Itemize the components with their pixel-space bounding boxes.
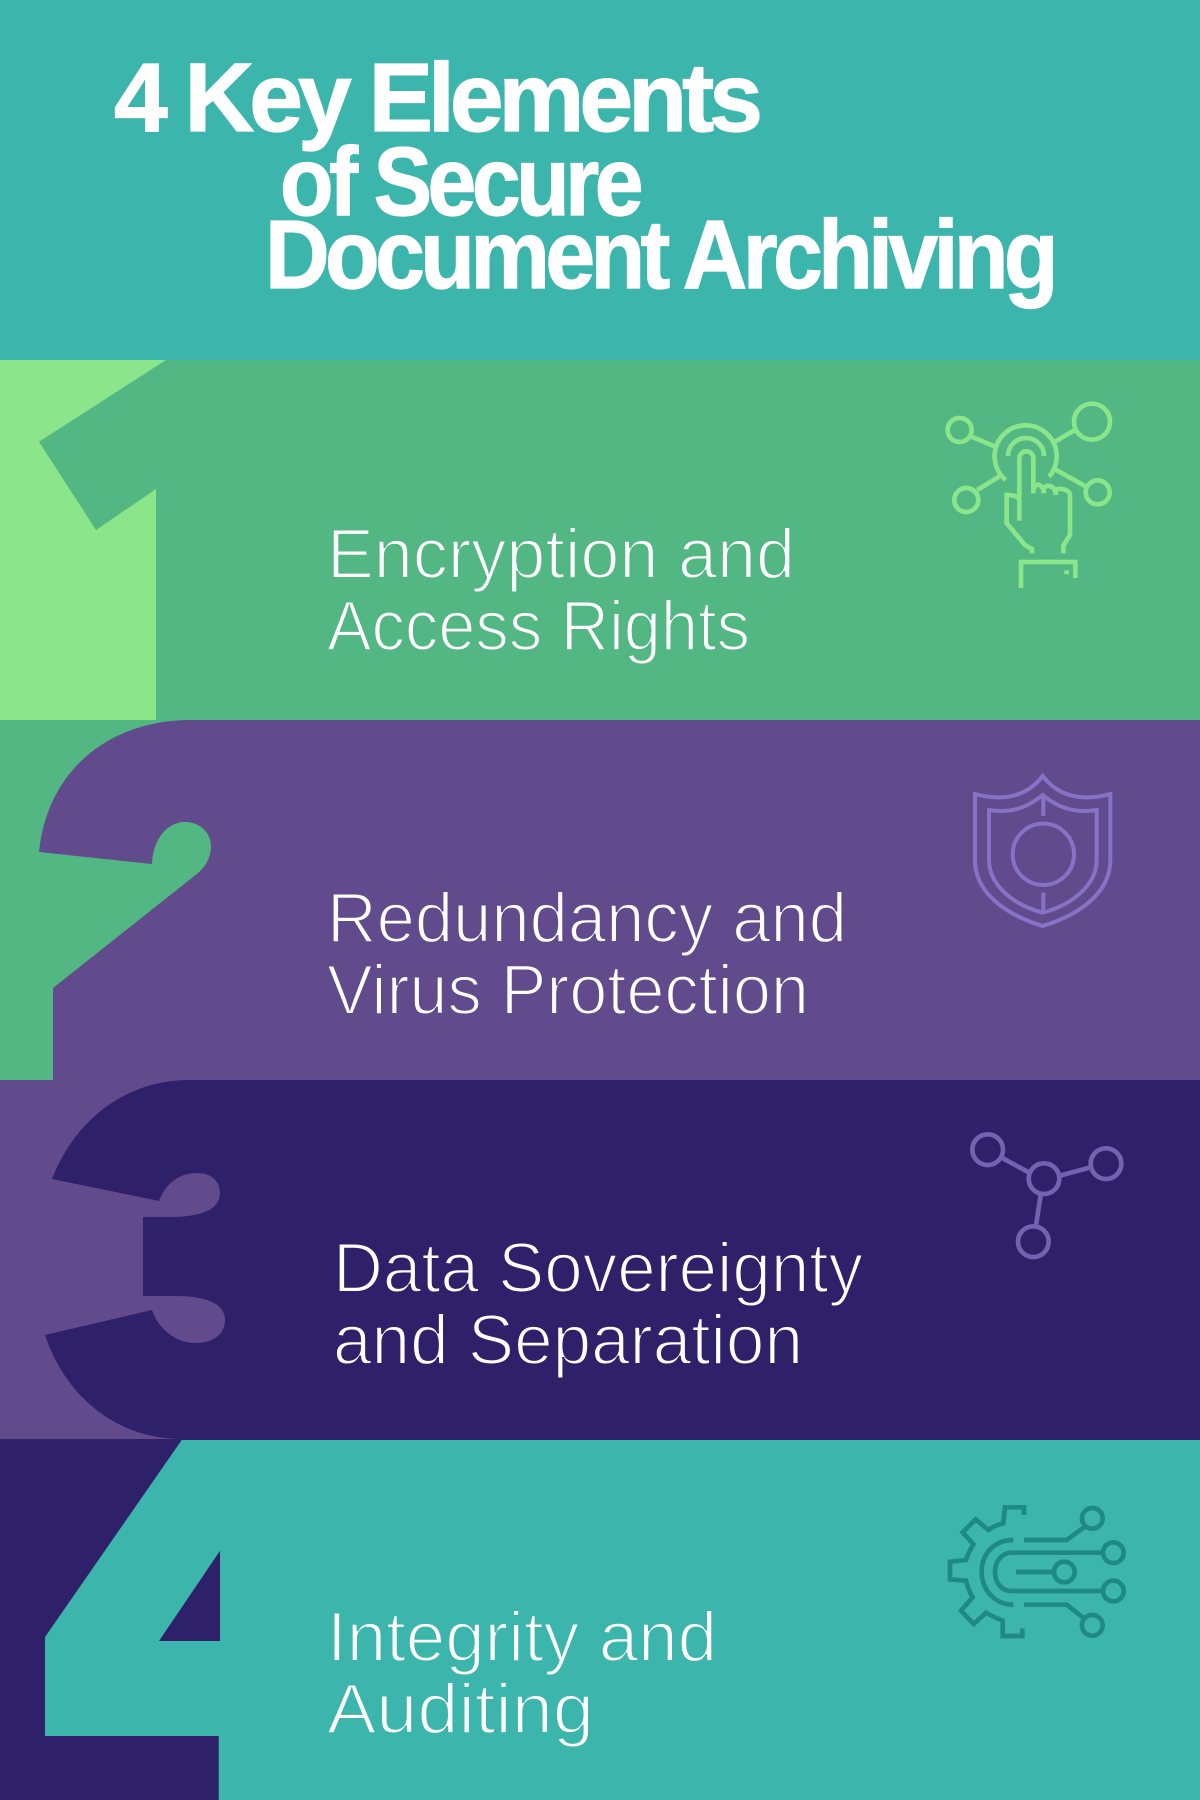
title: Document Archiving <box>265 200 1054 309</box>
panel: redundancy and virus protection <box>0 720 1200 1080</box>
label: integrity and auditing <box>327 1597 717 1748</box>
title: 4 Key Elements <box>114 43 759 152</box>
numeral 4 <box>0 1440 220 1800</box>
icon: shield <box>975 776 1110 926</box>
label: redundancy and virus protection: Redundancy and <box>327 878 847 957</box>
title <box>114 43 1054 309</box>
label: integrity and auditing: Auditing <box>327 1669 594 1748</box>
numeral 1 <box>0 360 166 720</box>
numeral 2 <box>0 720 211 1080</box>
label: redundancy and virus protection: Virus Protection <box>327 950 809 1029</box>
panel: encryption and access rights <box>0 360 1200 720</box>
icon: touch network <box>948 404 1110 588</box>
label: integrity and auditing: Integrity and <box>327 1597 717 1676</box>
label: encryption and access rights: Access Rights <box>327 586 750 665</box>
icon: gear circuit <box>950 1507 1124 1636</box>
panel: data sovereignty and separation <box>0 1080 1200 1440</box>
label: encryption and access rights: Encryption and <box>327 514 795 593</box>
icon: nodes <box>972 1134 1121 1257</box>
header band <box>0 0 1200 360</box>
label: data sovereignty and separation <box>333 1228 864 1379</box>
title: of Secure <box>280 127 641 236</box>
panel: integrity and auditing <box>0 1440 1200 1800</box>
label: redundancy and virus protection <box>327 878 847 1029</box>
label: data sovereignty and separation: Data Sovereignty <box>333 1228 864 1307</box>
numeral 3 <box>0 1080 225 1439</box>
label: encryption and access rights <box>327 514 795 665</box>
label: data sovereignty and separation: and Separation <box>333 1300 803 1379</box>
